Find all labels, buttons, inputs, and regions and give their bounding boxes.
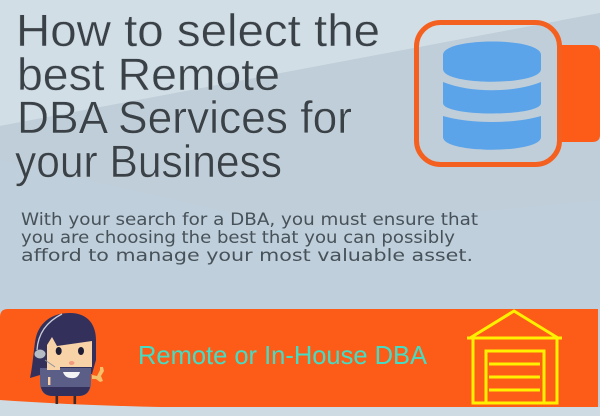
database middle disk <box>443 82 541 114</box>
face <box>47 337 92 370</box>
icon: database with orange frame <box>416 22 600 164</box>
legs <box>56 394 76 404</box>
title: How to select the <box>16 5 380 56</box>
headset <box>37 314 62 350</box>
badge <box>48 377 50 385</box>
title: your Business <box>15 136 282 187</box>
walls <box>473 338 557 403</box>
rounded frame <box>416 22 560 164</box>
collar <box>63 372 80 378</box>
intro text <box>21 210 478 266</box>
orange side tab <box>560 45 600 142</box>
title: DBA Services for <box>17 92 352 143</box>
title <box>15 5 380 187</box>
database bottom disk <box>443 116 541 150</box>
intro text: you are choosing the best that you can possibly <box>21 228 455 248</box>
orange banner <box>0 309 598 407</box>
icon: support agent character <box>30 313 104 404</box>
hand with wrench <box>92 367 104 382</box>
roof <box>467 311 562 338</box>
door slats <box>489 364 540 390</box>
database top disk <box>443 42 541 82</box>
icon: garage <box>467 311 562 403</box>
door <box>486 351 544 403</box>
hair back <box>30 313 96 378</box>
intro text: With your search for a DBA, you must ensure that <box>21 210 478 230</box>
intro text: afford to manage your most valuable asset. <box>21 246 473 266</box>
eyes <box>56 347 62 355</box>
banner label: Remote or In-House DBA <box>138 340 428 370</box>
mouth <box>69 361 74 365</box>
body <box>40 368 91 396</box>
title: best Remote <box>17 49 280 100</box>
